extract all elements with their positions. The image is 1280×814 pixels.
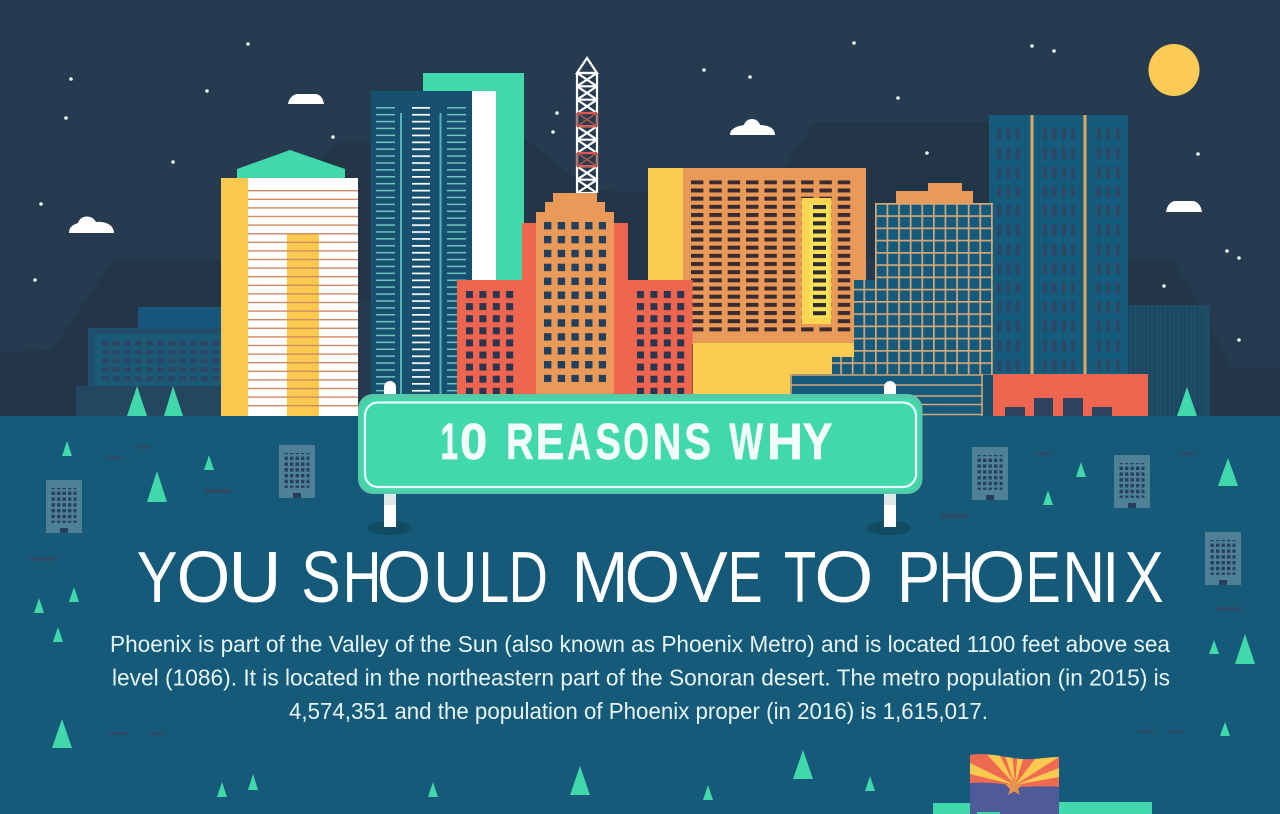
road sign [358, 381, 922, 535]
main title: V [680, 538, 728, 618]
night sky background [0, 0, 1280, 420]
main title: H [343, 538, 381, 618]
main title: S [301, 538, 341, 618]
intro paragraph: level (1086). It is located in the northeastern part of the Sonoran desert. The metro population (in 2015) is [112, 664, 1170, 690]
main title: I [1102, 538, 1119, 618]
building: orange hotel block [648, 168, 866, 397]
main title: M [571, 538, 629, 618]
building: low left block [76, 307, 222, 416]
main title: X [1125, 538, 1164, 618]
main title: D [508, 538, 548, 618]
sign text: W [729, 413, 764, 470]
sign text: S [595, 413, 621, 470]
trees [34, 386, 1255, 800]
intro paragraph: Phoenix is part of the Valley of the Sun (also known as Phoenix Metro) and is located 1100 feet above sea [110, 631, 1170, 657]
sign text: 0 [460, 413, 487, 470]
sign text: N [653, 413, 681, 470]
main title: H [939, 538, 974, 618]
icon: sun [1148, 44, 1200, 96]
main title: Y [137, 538, 178, 618]
small office icons [46, 445, 1241, 585]
main title: P [897, 538, 940, 618]
icon: Arizona flag [970, 750, 1059, 814]
sign text: Y [803, 413, 832, 470]
ground [0, 416, 1280, 814]
main title: O [177, 538, 230, 618]
main title: T [784, 538, 816, 618]
main title: E [1026, 538, 1060, 618]
main title: L [478, 538, 509, 618]
sign text: A [568, 413, 591, 470]
sign text: O [623, 413, 649, 470]
main title: N [1062, 538, 1105, 618]
main title: E [728, 538, 762, 618]
main title: O [968, 538, 1025, 618]
banner strip at bottom [933, 802, 1152, 814]
distant mountains [0, 122, 1280, 416]
building: tall blue tower [989, 115, 1148, 416]
ground dashes [30, 446, 1243, 735]
main title: U [433, 538, 478, 618]
main title: O [624, 538, 680, 618]
building: teal and blue tower [371, 73, 524, 397]
building: striped far right block [1128, 305, 1210, 416]
sign text: R [506, 413, 534, 470]
building: antenna tower [577, 58, 597, 193]
stars [33, 41, 1241, 342]
clouds [69, 94, 1202, 233]
sign text: H [767, 413, 803, 470]
building: white striped tower [221, 150, 358, 416]
building: red and orange art deco tower [457, 193, 692, 396]
intro paragraph: 4,574,351 and the population of Phoenix proper (in 2016) is 1,615,017. [289, 698, 988, 724]
building: blue glass grid block [790, 183, 993, 416]
sign text: 1 [440, 413, 458, 470]
sign text: S [684, 413, 711, 470]
sign text: E [536, 413, 564, 470]
main title: O [377, 538, 431, 618]
main title: U [228, 538, 282, 618]
main title: O [814, 538, 874, 618]
